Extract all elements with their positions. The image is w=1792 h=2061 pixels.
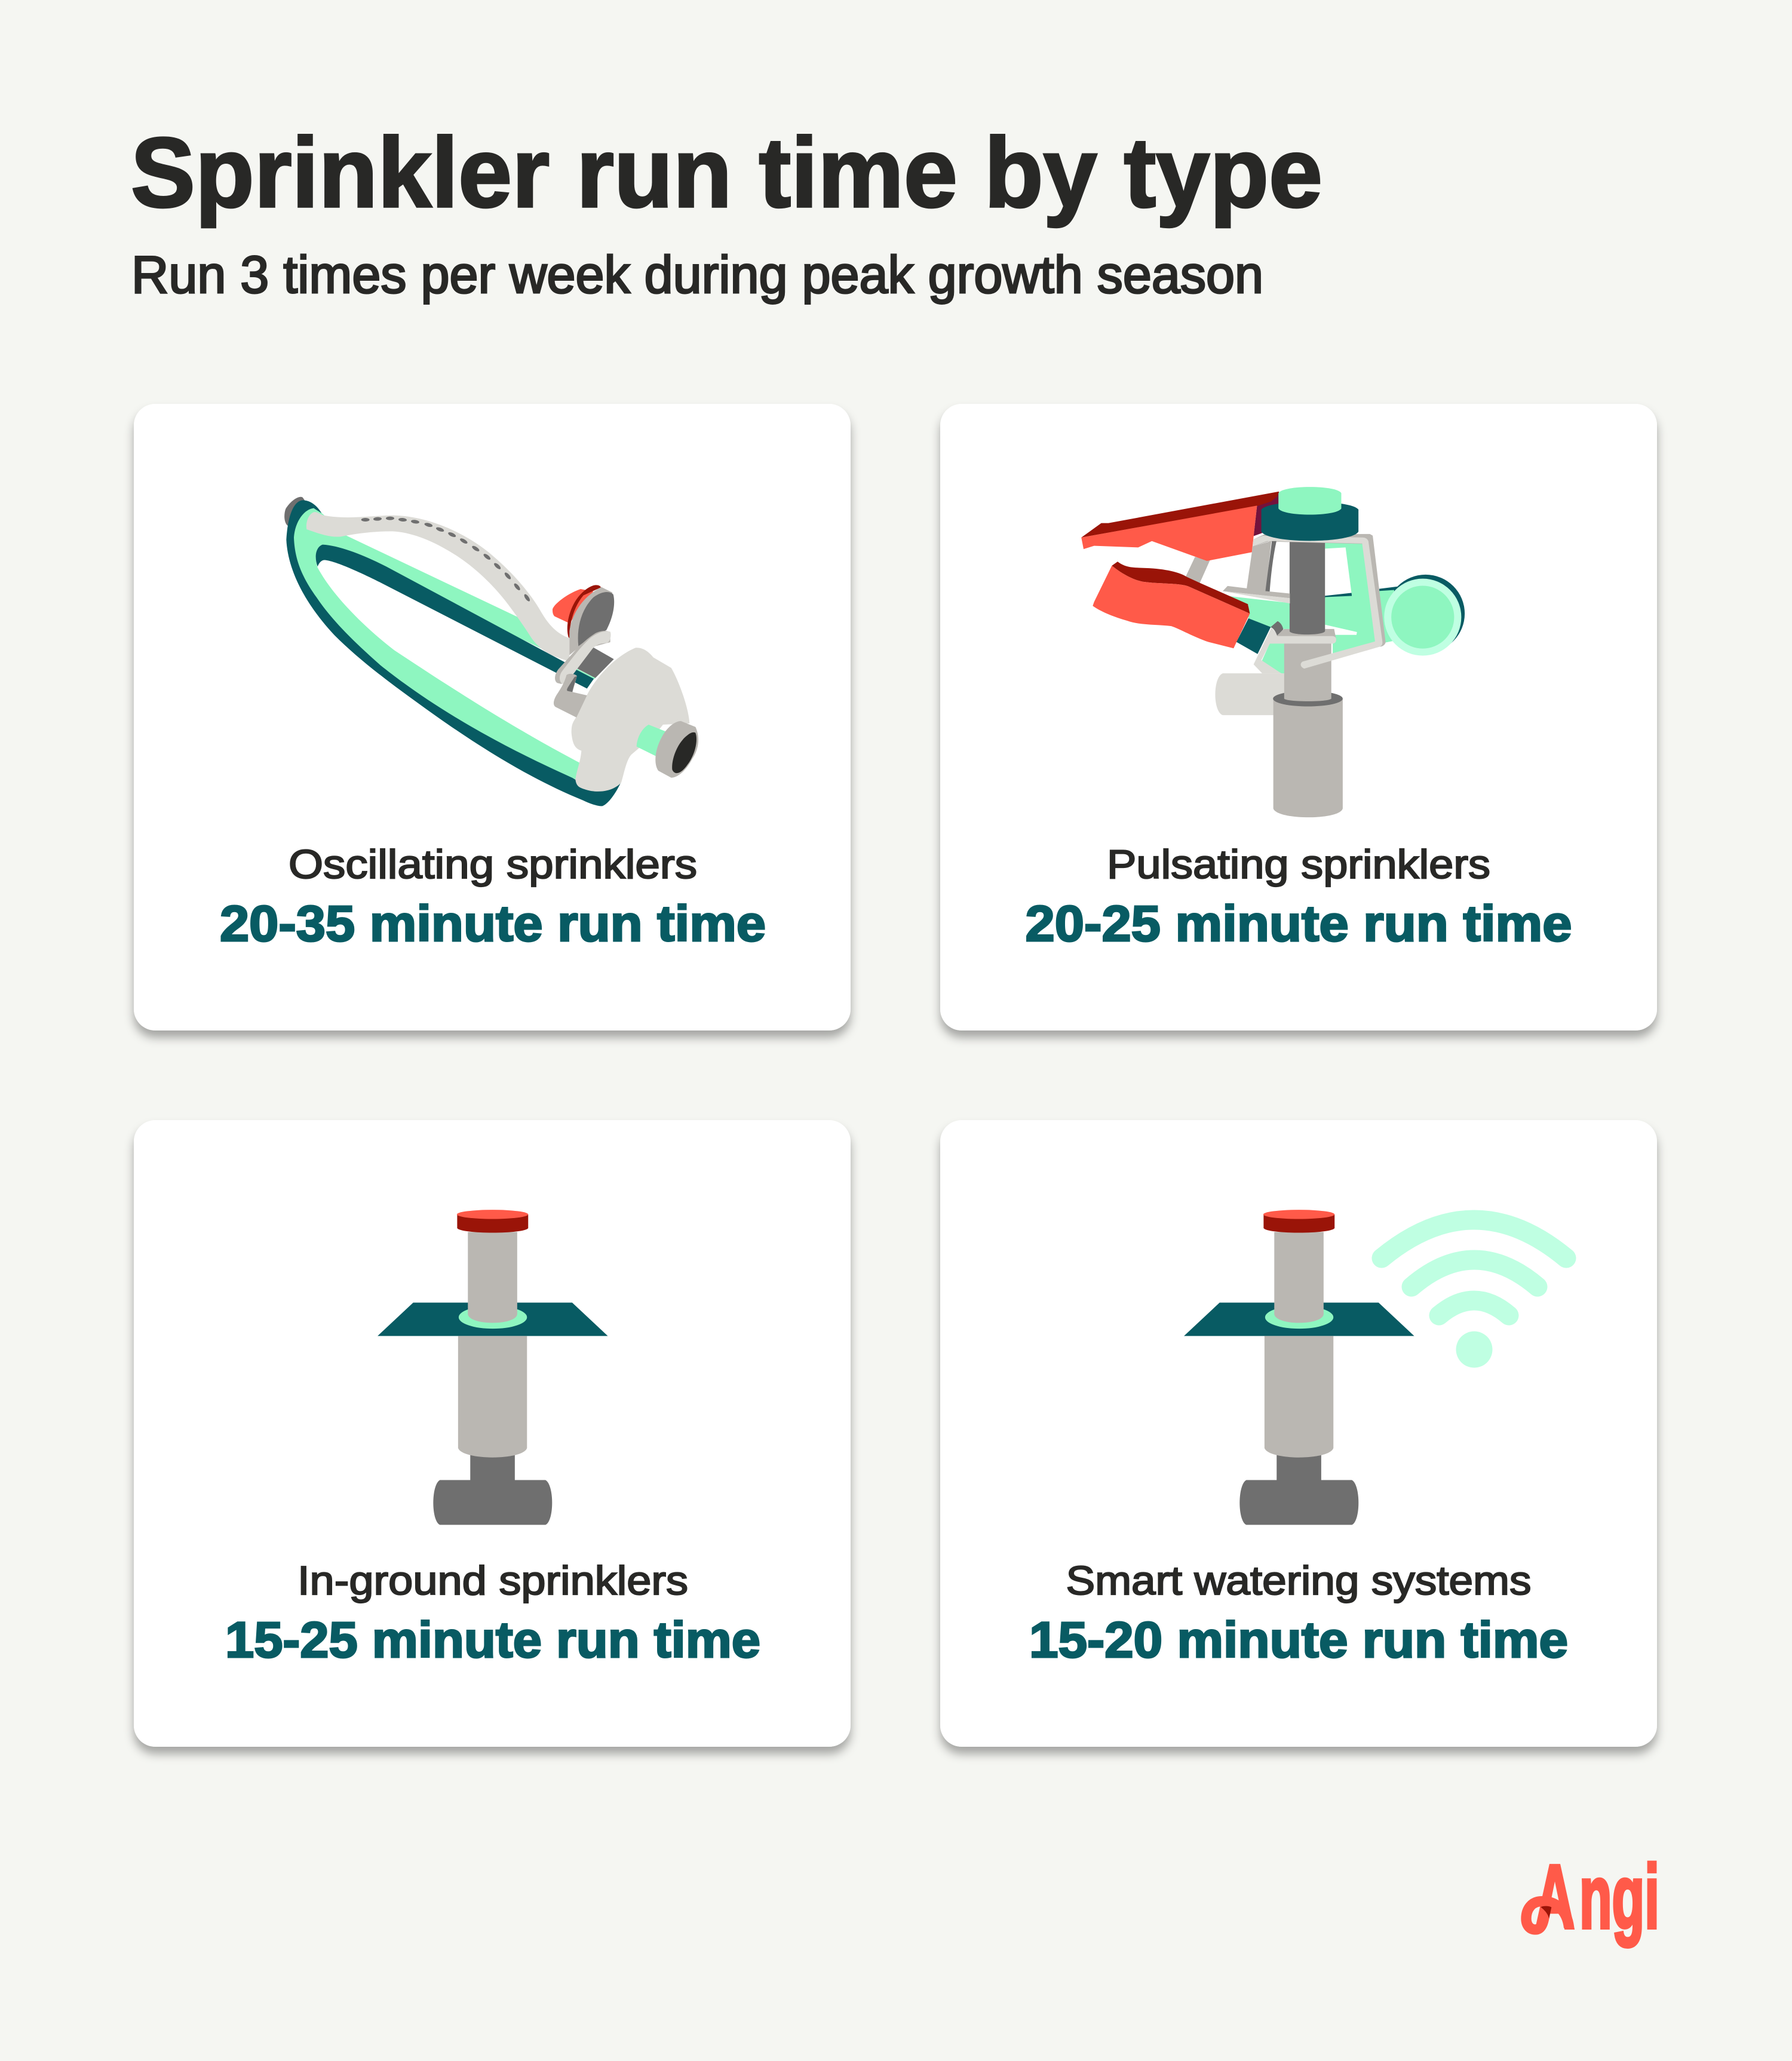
label: oscillating: Oscillating sprinklers bbox=[289, 842, 697, 887]
panel: smart watering systems bbox=[940, 1120, 1657, 1747]
label: pulsating: Pulsating sprinklers bbox=[1107, 842, 1490, 887]
label: in-ground: In-ground sprinklers bbox=[297, 1558, 688, 1603]
value: oscillating run time: 20-35 minute run time bbox=[220, 895, 766, 952]
value: pulsating run time: 20-25 minute run time bbox=[1025, 895, 1572, 952]
icon: pulsating sprinkler bbox=[1081, 487, 1465, 817]
logo: Angi: A bbox=[1535, 1846, 1575, 1947]
value: in-ground run time: 15-25 minute run time bbox=[225, 1612, 760, 1668]
subtitle: Run 3 times per week during peak growth season bbox=[131, 245, 1263, 304]
panel: oscillating sprinklers bbox=[134, 404, 851, 1030]
panel: in-ground sprinklers bbox=[134, 1120, 851, 1747]
icon: in-ground sprinkler bbox=[378, 1210, 608, 1525]
icon: smart sprinkler bbox=[1184, 1210, 1414, 1525]
icon: oscillating sprinkler bbox=[284, 497, 698, 806]
icon: wifi signal bbox=[1382, 1220, 1566, 1368]
title: Sprinkler run time by type bbox=[131, 118, 1322, 228]
label: smart: Smart watering systems bbox=[1066, 1558, 1532, 1603]
panel: pulsating sprinklers bbox=[940, 404, 1657, 1030]
value: smart run time: 15-20 minute run time bbox=[1029, 1612, 1568, 1668]
logo: Angi bbox=[1526, 1846, 1659, 1947]
logo: Angi: ngi bbox=[1579, 1846, 1659, 1947]
